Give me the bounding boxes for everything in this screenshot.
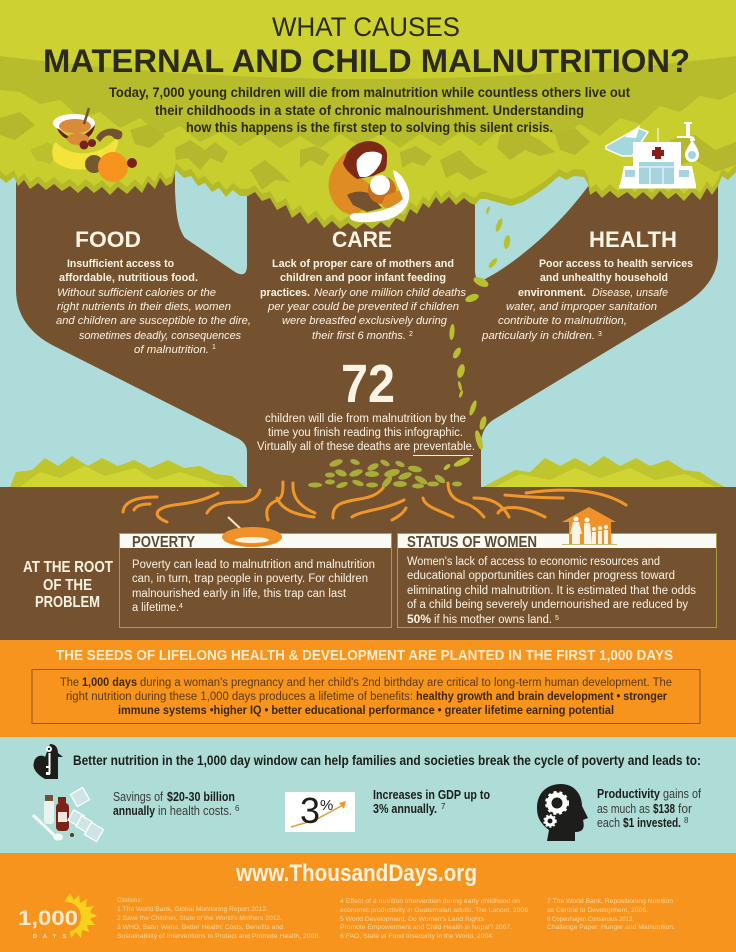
intro text: their childhoods in a state of chronic malnourishment. Understanding <box>155 103 584 118</box>
text: productivity: as much as <box>597 801 650 816</box>
text: care: 2 <box>409 331 413 338</box>
text: savings: in health costs. <box>158 803 232 818</box>
text: GDP: 3% annually. <box>373 801 437 816</box>
intro text: how this happens is the first step to solving this silent crisis. <box>186 120 553 135</box>
text: health: Disease, unsafe <box>592 287 668 299</box>
icon: head with gears <box>537 784 588 841</box>
panel: poverty: Poverty can lead to malnutrition and malnutrition <box>132 559 375 571</box>
tree trunk and branches <box>16 170 718 490</box>
title: MATERNAL AND CHILD MALNUTRITION? <box>43 43 690 79</box>
text: food: of malnutrition. <box>134 344 209 356</box>
citations: Sustainability of Interventions to Protect and Promote Health, 2008. <box>117 933 320 940</box>
text: GDP: Increases in GDP up to <box>373 787 490 802</box>
logo: 1,000 days: DAYS <box>33 934 66 940</box>
panel: poverty: 4 <box>179 603 183 610</box>
panel: status of women: STATUS OF WOMEN <box>407 534 537 551</box>
icon: hospital, tissue box and tap <box>606 122 699 188</box>
chart: 3% growth arrow <box>285 790 355 832</box>
text: care: practices. <box>260 287 310 299</box>
band: first 1,000 days <box>0 640 736 737</box>
panel: 1,000 days text: immune systems •higher IQ • better educational performance • greater lifetime earning potential <box>118 705 614 717</box>
citations: economic productivity in Guatemalan adults. The Lancet, 2008 <box>340 907 528 914</box>
text: care: children and poor infant feeding <box>280 272 446 284</box>
panel: poverty: malnourished early in life, this trap can last <box>132 588 347 600</box>
text: care: their first 6 months. <box>312 330 406 342</box>
panel: poverty: can, in turn, trap people in poverty. For children <box>132 573 368 585</box>
label: at the root of the problem: AT THE ROOT <box>23 559 113 576</box>
text: savings: 6 <box>235 804 240 813</box>
text: health: contribute to malnutrition, <box>498 315 627 327</box>
citations: 2 Save the Children, State of the World's Mothers 2012. <box>117 915 282 922</box>
text: health: 3 <box>598 331 602 338</box>
logo: 1,000 days: 1,000 <box>18 907 78 930</box>
text: food <box>56 258 251 356</box>
panel: poverty: a lifetime. <box>132 602 179 614</box>
text: health: and unhealthy household <box>540 272 668 284</box>
statistic: 72 children: time you finish reading this infographic. <box>268 427 463 439</box>
text: care: were breastfed exclusively during <box>282 315 448 327</box>
text: food: affordable, nutritious food. <box>59 272 198 284</box>
citations: 8 Copenhagen Consensus 2012, <box>547 916 634 923</box>
intro text: Today, 7,000 young children will die from malnutrition while countless others live out <box>109 85 630 100</box>
text: care <box>260 258 467 342</box>
citations <box>117 897 675 940</box>
text: GDP: 7 <box>441 802 446 811</box>
panel: 1,000 days text: 1,000 days <box>82 677 137 689</box>
text: health: environment. <box>518 287 586 299</box>
right bush <box>483 456 725 487</box>
icon: bowl and spoon <box>222 517 282 547</box>
panel: status of women: 50% <box>407 614 431 626</box>
panel: 1,000 days text: healthy growth and brain development • stronger <box>416 691 667 703</box>
statistic: 72 children: 72 <box>341 354 395 414</box>
text: productivity: Productivity <box>597 786 661 801</box>
text: food: sometimes deadly, consequences <box>79 330 241 342</box>
text: health: particularly in children. <box>481 330 595 342</box>
tree canopy <box>0 0 736 229</box>
text: care: Nearly one million child deaths <box>314 287 467 299</box>
heading: seeds of lifelong health: THE SEEDS OF LIFELONG HEALTH & DEVELOPMENT ARE PLANTED IN THE FIRST 1,000 DAYS <box>56 647 673 664</box>
text: food: 1 <box>212 344 216 351</box>
label: at the root of the problem: OF THE <box>43 577 92 594</box>
text: productivity <box>597 786 701 830</box>
label: at the root of the problem <box>23 559 113 611</box>
text: food: right nutrients in their diets, women <box>57 301 231 313</box>
health column <box>481 227 693 342</box>
text: health: Poor access to health services <box>539 258 693 270</box>
statistic: 72 children <box>257 354 475 456</box>
text: food: Insufficient access to <box>67 258 174 270</box>
text: health: water, and improper sanitation <box>506 301 657 313</box>
website url: www.ThousandDays.org <box>235 860 477 887</box>
label: at the root of the problem: PROBLEM <box>35 594 100 611</box>
citations: 6 FAO, State of Food Insecurity in the World, 2004 <box>340 933 492 940</box>
text: health <box>481 258 693 342</box>
icon: bird key <box>33 744 63 779</box>
panel: 1,000 days text: right nutrition during these 1,000 days produces a lifetime of benefits: <box>66 691 413 703</box>
text: productivity: gains of <box>663 786 701 801</box>
panel: 1,000 days text <box>32 670 700 724</box>
text: care: per year could be prevented if children <box>267 301 459 313</box>
pile of leaves <box>308 458 462 489</box>
citations: Promote Empowerment and Child Health in Nepal? 2007. <box>340 924 512 931</box>
logo: 1,000 days <box>18 893 97 940</box>
footer band <box>0 853 736 952</box>
citations: 5 World Development, Do Women's Land Rights <box>340 916 485 923</box>
title: WHAT CAUSES <box>272 12 460 42</box>
panel: status of women: of a child being severely undernourished are reduced by <box>407 599 688 611</box>
icon: medicine <box>33 787 104 842</box>
panel: poverty: POVERTY <box>132 534 195 551</box>
citations: Citations: <box>117 897 142 904</box>
panel: status of women: eliminating child malnutrition. It is estimated that the odds <box>407 585 696 597</box>
panel: 1,000 days text: during a woman's pregnancy and her child's 2nd birthday are critical to long-term human development. The <box>140 677 672 689</box>
heading: care: CARE <box>332 227 392 252</box>
band: benefits <box>0 737 736 853</box>
heading: food: FOOD <box>75 227 141 252</box>
roots <box>123 482 626 522</box>
icon: mother and child <box>329 141 409 222</box>
citations: 4 Effect of a nutrition intervention during early childhood on <box>340 898 520 905</box>
text: food: Without sufficient calories or the <box>57 287 216 299</box>
panel: status of women <box>398 534 716 628</box>
ground brown <box>0 487 736 640</box>
panel: poverty <box>120 534 392 628</box>
citations: Challenge Paper: Hunger and Malnutrition. <box>547 924 675 931</box>
text: food: and children are susceptible to the dire, <box>56 315 251 327</box>
text: productivity: 8 <box>684 816 689 825</box>
text: productivity: for <box>678 801 693 816</box>
text: savings <box>113 789 240 818</box>
title <box>43 12 690 79</box>
citations: 7 The World Bank, Repositioning Nutrition <box>547 898 673 905</box>
icon: house with family <box>562 507 617 544</box>
citations: 1 The World Bank, Global Monitoring Report 2012. <box>117 906 268 913</box>
text: GDP <box>373 787 490 816</box>
statistic: 72 children: Virtually all of these deaths are preventable. <box>257 441 475 453</box>
text: savings: annually <box>113 803 156 818</box>
panel: 1,000 days text: The <box>60 677 79 689</box>
text: care: Lack of proper care of mothers and <box>272 258 454 270</box>
heading: health: HEALTH <box>589 227 677 252</box>
text: productivity: $1 invested. <box>623 815 681 830</box>
panel: status of women: Women's lack of access to economic resources and <box>407 556 660 568</box>
chart: 3% growth arrow: 3 <box>300 790 320 831</box>
panel: status of women: educational opportunities can hinder progress toward <box>407 570 675 582</box>
chart: 3% growth arrow: % <box>320 797 333 814</box>
citations: as Central to Development, 2006. <box>547 907 648 914</box>
left bush <box>10 456 245 487</box>
text: savings: $20-30 billion <box>167 789 235 804</box>
falling leaves <box>443 206 511 471</box>
care column <box>260 227 467 342</box>
panel: status of women: 5 <box>555 615 559 622</box>
statistic: 72 children: children will die from malnutrition by the <box>265 413 466 425</box>
food column <box>56 227 251 356</box>
intro text <box>109 85 630 135</box>
icon: food bowl and fruit <box>52 108 137 182</box>
text: productivity: $138 <box>653 801 675 816</box>
text: productivity: each <box>597 815 620 830</box>
text: savings: Savings of <box>113 789 163 804</box>
panel: status of women: if his mother owns land. <box>434 614 552 626</box>
citations: 3 WHO, Safer Water, Better Health: Costs, Benefits and <box>117 924 283 931</box>
